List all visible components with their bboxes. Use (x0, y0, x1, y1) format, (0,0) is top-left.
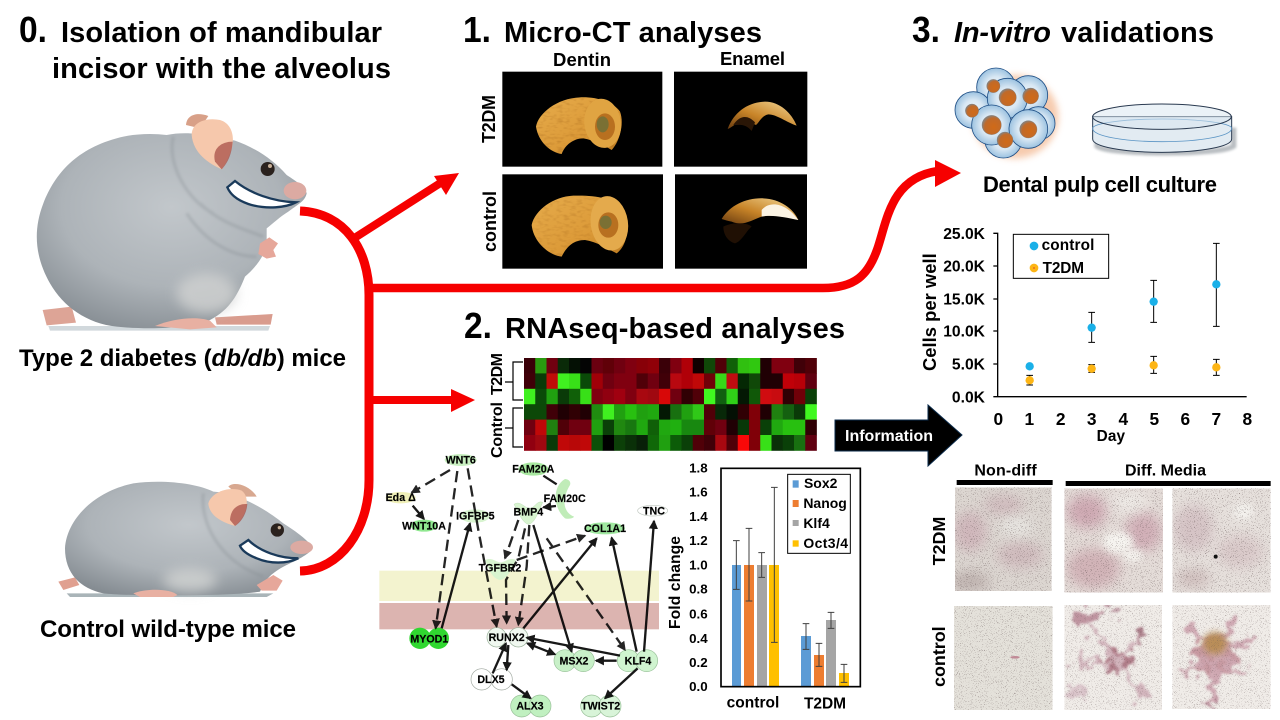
y-axis labels: 0.0K (952, 389, 986, 406)
label: enamel: Enamel (720, 48, 785, 69)
label: heatmap control: Control (489, 402, 506, 458)
axis title and categories: control (727, 695, 779, 712)
node labels: DLX5 (477, 674, 505, 686)
legend: Sox2 (804, 475, 838, 491)
row labels (929, 517, 949, 687)
heading 0: Isolation of mandibular (61, 17, 382, 49)
y-axis tick labels: 1.6 (689, 484, 708, 499)
heatmap (524, 358, 817, 451)
y-axis labels: 20.0K (943, 259, 986, 276)
y-axis tick labels: 1.2 (689, 533, 708, 548)
heading 2 (464, 305, 845, 346)
node labels: WNT10A (402, 520, 446, 532)
heading 3 (912, 9, 1214, 50)
x-axis labels: 7 (1212, 409, 1221, 429)
node labels: IGFBP5 (456, 511, 495, 523)
micrograph: control diff 2 (1172, 605, 1271, 709)
node shapes (386, 454, 668, 717)
node labels: MSX2 (559, 655, 589, 667)
y-axis tick labels: 0.8 (689, 582, 708, 597)
legend: Oct3/4 (803, 535, 848, 551)
label: control row: control (480, 191, 500, 252)
node labels: TNC (643, 505, 665, 517)
x-axis labels: 0 (994, 409, 1003, 429)
node labels: TGFBR2 (479, 563, 521, 575)
label: dentin: Dentin (553, 49, 611, 70)
micrograph: T2DM non-diff (955, 487, 1052, 591)
legend (1013, 234, 1109, 278)
axis title and categories: Fold change (667, 536, 684, 629)
axis titles: Cells per well (919, 253, 940, 371)
legend: control (1042, 237, 1094, 254)
panel: in-vitro validations (912, 9, 1271, 710)
label: dental pulp cell culture: Dental pulp cell culture (983, 172, 1217, 197)
y-axis tick labels (689, 460, 708, 694)
heading 3: 3. (912, 9, 940, 50)
error bars (1026, 243, 1220, 385)
label: heatmap T2DM: T2DM (489, 353, 506, 395)
y-axis labels: 10.0K (943, 324, 986, 341)
arrows: red workflow connectors (300, 160, 961, 571)
arrow: information (835, 405, 962, 466)
solid edges (413, 476, 654, 698)
arrow: information: Information (845, 428, 933, 445)
label: type 2 diabetes mice: Type 2 diabetes (db/db) mice (19, 345, 346, 372)
group headers: Diff. Media (1125, 463, 1206, 480)
legend: T2DM (1043, 260, 1084, 277)
x-axis labels: 3 (1087, 409, 1097, 429)
staining panels (929, 463, 1271, 710)
icon: type 2 diabetes mouse (37, 114, 307, 331)
node labels: RUNX2 (489, 632, 525, 644)
y-axis labels (943, 226, 986, 406)
x-axis labels: 4 (1119, 409, 1129, 429)
heading 0: 0. (19, 9, 47, 50)
micrograph: control diff 1 (1064, 605, 1162, 710)
image: control enamel (675, 174, 807, 269)
panel: micro-CT analyses (463, 9, 807, 269)
network diagram (379, 454, 668, 717)
heading 0 (19, 9, 391, 85)
dashed edges (412, 468, 625, 650)
image: T2DM enamel (674, 72, 807, 167)
axes (993, 233, 1247, 397)
legend: Klf4 (803, 515, 830, 531)
heading 1: 1. (463, 9, 491, 50)
image: control dentin (502, 174, 663, 269)
micrograph: control non-diff (954, 606, 1053, 710)
bars (732, 565, 849, 687)
icon: control wild-type mouse (58, 482, 313, 597)
node labels: Eda Δ (386, 492, 416, 504)
y-axis tick labels: 1.0 (689, 558, 708, 573)
axis titles (919, 253, 1125, 445)
x-axis labels: 1 (1025, 409, 1035, 429)
legend (788, 474, 850, 553)
axis title and categories: T2DM (804, 695, 846, 712)
group headers (957, 463, 1271, 486)
node labels: ALX3 (516, 701, 544, 713)
micrograph: T2DM diff 1 (1064, 488, 1163, 593)
control series (1025, 280, 1220, 370)
x-axis labels: 5 (1150, 409, 1160, 429)
heading 2: RNAseq-based analyses (505, 313, 845, 345)
bar chart: fold change (667, 460, 860, 712)
heading 3: In-vitro (954, 17, 1051, 49)
heading 3: validations (1061, 17, 1214, 49)
heatmap brackets (505, 362, 523, 447)
node labels: COL1A1 (584, 523, 626, 535)
node labels: TWIST2 (581, 701, 620, 713)
node labels: KLF4 (625, 655, 651, 667)
panel: isolation of mandibular incisor (19, 9, 391, 643)
node labels: WNT6 (446, 455, 476, 467)
axis title and categories (667, 536, 846, 712)
y-axis tick labels: 0.2 (689, 655, 708, 670)
chart frame (721, 468, 860, 687)
legend: Nanog (803, 495, 847, 511)
group headers: Non-diff (974, 463, 1037, 480)
y-axis tick labels: 1.4 (689, 509, 708, 524)
heading 1 (463, 9, 762, 50)
x-axis labels: 8 (1243, 409, 1253, 429)
label: T2DM row: T2DM (479, 95, 499, 143)
node labels: BMP4 (514, 507, 543, 519)
icon: dental pulp cells (955, 68, 1234, 158)
T2DM series (1025, 361, 1220, 384)
x-axis labels (994, 409, 1253, 429)
x-axis labels: 2 (1056, 409, 1065, 429)
panel: RNAseq-based analyses (379, 305, 860, 717)
heading 1: Micro-CT analyses (504, 17, 762, 49)
micrograph: T2DM diff 2 (1172, 488, 1271, 593)
y-axis tick labels: 0.0 (689, 679, 708, 694)
y-axis labels: 5.0K (952, 357, 986, 374)
y-axis labels: 15.0K (943, 292, 986, 309)
heading 2: 2. (464, 305, 492, 346)
axis titles: Day (1097, 428, 1125, 445)
row labels: control (929, 626, 949, 687)
node labels: FAM20C (544, 493, 586, 505)
node labels (386, 455, 665, 713)
x-axis labels: 6 (1181, 409, 1191, 429)
y-axis labels: 25.0K (943, 226, 986, 243)
heading 0: incisor with the alveolus (52, 53, 391, 85)
y-axis tick labels: 0.4 (689, 631, 708, 646)
error bars (733, 487, 847, 682)
image: T2DM dentin (502, 72, 662, 167)
label: control wild-type mice: Control wild-type mice (40, 616, 296, 643)
scatter plot: cells per well (919, 226, 1253, 445)
y-axis tick labels: 0.6 (689, 606, 708, 621)
node labels: MYOD1 (410, 633, 448, 645)
y-axis tick labels: 1.8 (689, 460, 708, 475)
node labels: FAM20A (512, 464, 555, 476)
row labels: T2DM (929, 517, 949, 565)
